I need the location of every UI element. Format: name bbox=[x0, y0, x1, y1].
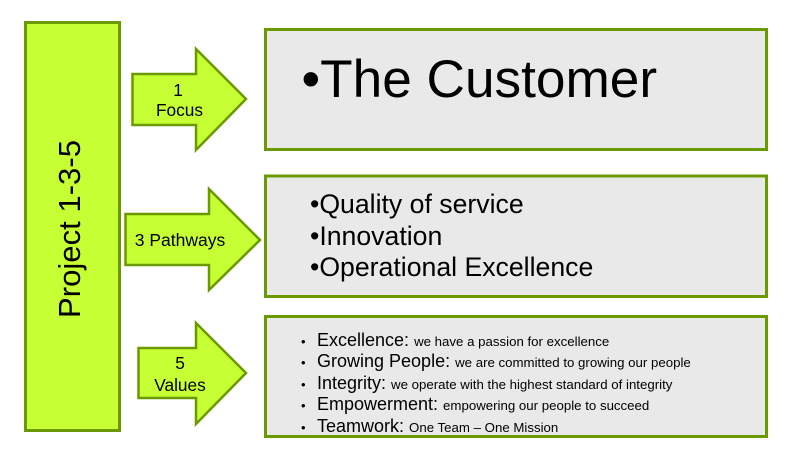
value: Growing People: • bbox=[301, 355, 306, 370]
panel: 3 pathways list: •Operational Excellence bbox=[310, 252, 593, 282]
panel: 3 pathways list: •Innovation bbox=[310, 221, 442, 251]
panel: The Customer bbox=[266, 30, 766, 150]
value: Empowerment: Empowerment: empowering our people to succeed bbox=[317, 394, 649, 414]
arrow: 5 Values: 5 bbox=[175, 353, 185, 373]
arrow: 5 Values bbox=[138, 323, 246, 424]
panel: The Customer: •The Customer bbox=[302, 50, 657, 109]
panel: Project 1-3-5 bbox=[26, 22, 120, 430]
label: Project 1-3-5: Project 1-3-5 bbox=[52, 140, 87, 318]
panel: 5 values list bbox=[266, 316, 766, 436]
value: Teamwork: • bbox=[301, 420, 306, 435]
value: Integrity: • bbox=[301, 377, 306, 392]
value: Growing People: Growing People: we are committed to growing our people bbox=[317, 351, 691, 371]
value: Integrity: Integrity: we operate with the highest standard of integrity bbox=[317, 373, 673, 393]
value: Excellence: Excellence: we have a passion for excellence bbox=[317, 330, 609, 350]
panel: 3 pathways list bbox=[266, 176, 766, 296]
arrow: 3 Pathways: 3 Pathways bbox=[135, 230, 225, 250]
arrow: 3 Pathways bbox=[126, 189, 260, 290]
value: Empowerment: • bbox=[301, 398, 306, 413]
arrow: 1 Focus bbox=[132, 49, 246, 150]
value: Teamwork: Teamwork: One Team – One Mission bbox=[317, 416, 558, 436]
arrow: 5 Values: Values bbox=[154, 375, 206, 395]
panel: 3 pathways list: •Quality of service bbox=[310, 189, 524, 219]
value: Excellence: • bbox=[301, 334, 306, 349]
arrow: 1 Focus: 1 bbox=[173, 80, 183, 100]
arrow: 1 Focus: Focus bbox=[156, 100, 203, 120]
